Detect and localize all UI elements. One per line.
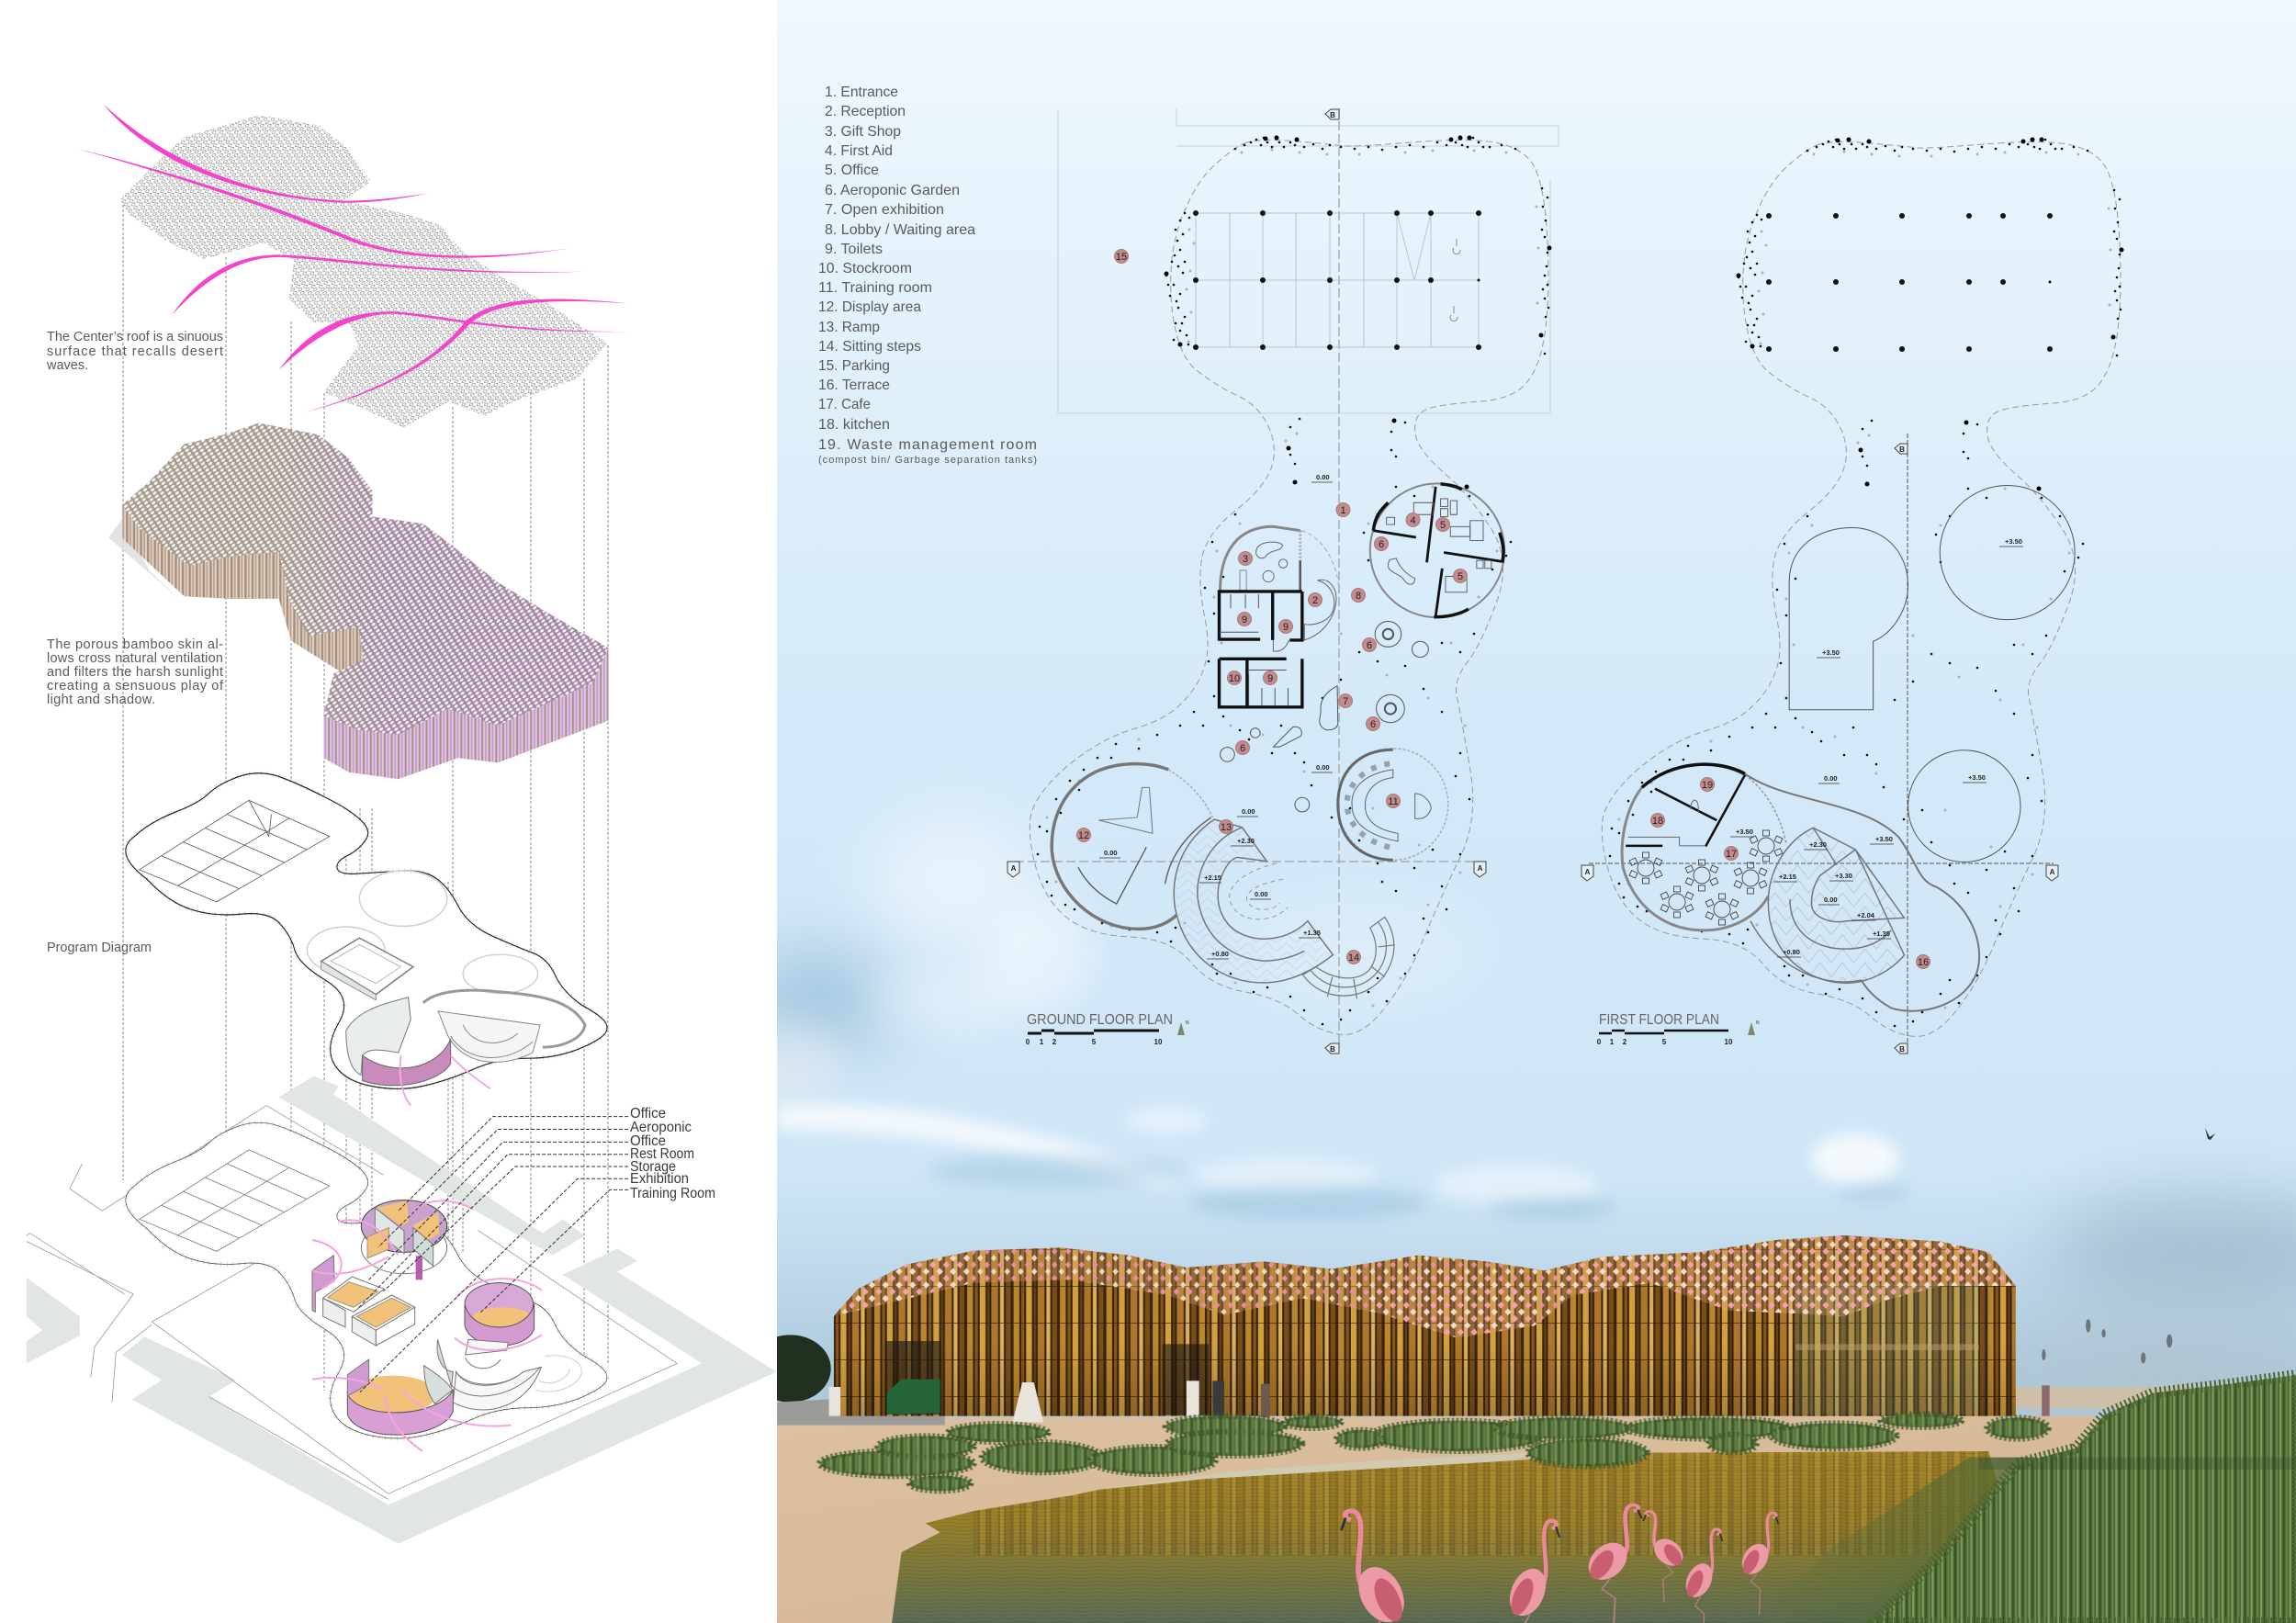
ground-floor slab blob — [126, 1122, 607, 1438]
ground floor room number markers: 4 — [1410, 515, 1416, 526]
box volume — [321, 938, 413, 995]
first floor plan — [1589, 140, 2122, 1047]
callout labels: Storage — [630, 1159, 676, 1175]
ground floor room number markers: 6 — [1240, 743, 1245, 754]
ground floor plan — [1015, 107, 1559, 1045]
reed blend into water — [1809, 1457, 2035, 1623]
section axes first floor — [1589, 434, 2054, 1047]
scale bar first floor: 0 — [1597, 1038, 1602, 1046]
first floor level markers: +2.04 — [1857, 911, 1875, 919]
icon: bird — [2205, 1128, 2215, 1140]
legend of rooms: 2. Reception — [825, 104, 906, 119]
first floor level markers: 0.00 — [1824, 774, 1838, 783]
isometric diagram: roof surface with wind lines — [77, 105, 628, 428]
title: first floor plan: FIRST FLOOR PLAN — [1599, 1012, 1719, 1028]
legend of rooms: 12. Display area — [818, 299, 921, 315]
building linework — [1052, 483, 1504, 998]
office circle — [1370, 483, 1504, 617]
legend of rooms: (compost bin/ Garbage separation tanks) — [818, 455, 1037, 466]
ground floor room number markers: 15 — [1116, 252, 1127, 263]
first floor level markers: 0.00 — [1824, 896, 1838, 904]
ground floor room number markers: 13 — [1221, 822, 1232, 833]
first floor level markers: +3.50 — [1968, 773, 1986, 782]
ground floor room number markers: 8 — [1356, 591, 1361, 602]
legend of rooms: 10. Stockroom — [818, 261, 912, 276]
water — [892, 1451, 2037, 1623]
legend of rooms: 4. First Aid — [825, 143, 893, 159]
text: roof description — [46, 330, 223, 373]
callout labels: Aeroponic — [630, 1120, 692, 1135]
glass wing — [1795, 1283, 1979, 1414]
roof over offices — [1940, 486, 2075, 620]
scale bar ground floor: 5 — [1092, 1038, 1097, 1046]
entrance openings — [885, 1341, 941, 1414]
section markers first floor: A — [1585, 868, 1591, 876]
section markers first floor: B — [1899, 445, 1905, 454]
legend of rooms: 17. Cafe — [818, 397, 871, 412]
bamboo columns lower wing — [323, 648, 608, 779]
text: roof description: waves. — [46, 358, 88, 373]
ground floor room number markers: 7 — [1343, 696, 1348, 707]
faint site lines — [1058, 107, 1559, 413]
first-floor slab blob — [126, 773, 607, 1106]
sand ground — [777, 1416, 2133, 1623]
roof pink panels — [838, 1235, 2016, 1338]
vertical dashed projection lines — [123, 205, 608, 1391]
scale bar ground floor: 0 — [1026, 1038, 1030, 1046]
text: bamboo skin description — [47, 637, 224, 707]
roof over services — [1789, 528, 1908, 710]
white dot grid — [122, 423, 608, 735]
callout labels — [630, 1106, 715, 1201]
cafe tables — [1629, 830, 1783, 925]
first floor level markers: +0.80 — [1783, 948, 1800, 956]
terrace outline — [1745, 773, 1979, 1011]
legend of rooms: 14. Sitting steps — [818, 339, 921, 355]
left purple wall segments — [312, 1256, 334, 1312]
north arrow ground floor — [1177, 1020, 1189, 1035]
section markers ground floor: A — [1478, 864, 1483, 873]
wind lines pink — [77, 105, 628, 412]
first floor level markers: +2.30 — [1809, 840, 1827, 849]
ramp stepped arcs — [437, 1339, 541, 1410]
roof over training — [1908, 750, 2020, 862]
office aeroponic cylinder — [361, 1200, 447, 1279]
ground floor room number markers: 14 — [1348, 952, 1359, 964]
wind arrows pink — [312, 1200, 542, 1451]
callout labels: Office — [630, 1133, 666, 1149]
legend of rooms: 8. Lobby / Waiting area — [825, 222, 975, 238]
first floor room number markers: 18 — [1652, 816, 1663, 827]
text: bamboo skin description: and filters the harsh sunlight — [47, 665, 223, 680]
isometric diagram: bamboo skin volume — [108, 423, 608, 779]
roof mesh surface — [119, 115, 607, 428]
callout labels: Office — [630, 1106, 666, 1121]
ground floor level markers: 0.00 — [1316, 473, 1330, 481]
bamboo columns upper wing — [329, 490, 372, 524]
legend of rooms: 5. Office — [825, 163, 879, 178]
section markers ground floor — [1007, 109, 1486, 1054]
flamingos — [1341, 1505, 1778, 1623]
first floor level markers: +3.50 — [1875, 835, 1893, 843]
scale bar first floor: 1 — [1610, 1038, 1615, 1046]
legend of rooms: 1. Entrance — [825, 85, 898, 100]
section markers ground floor: A — [1011, 864, 1017, 873]
ground floor room number markers: 6 — [1367, 640, 1372, 651]
ground floor room number markers: 6 — [1379, 539, 1384, 550]
ground floor room number markers: 5 — [1440, 520, 1446, 531]
ground floor room number markers: 3 — [1243, 554, 1248, 565]
display area circle — [1052, 764, 1212, 929]
first floor level markers: +3.50 — [2005, 537, 2022, 546]
section markers ground floor: B — [1330, 111, 1335, 119]
first floor room number markers: 19 — [1702, 780, 1713, 791]
section markers ground floor: B — [1330, 1045, 1335, 1054]
ground floor level markers: +0.80 — [1211, 950, 1229, 958]
aeroponic rings — [1221, 622, 1428, 812]
trees first floor — [1610, 140, 2122, 1026]
ramp top — [438, 1011, 540, 1062]
ramp first floor — [1750, 828, 1904, 983]
ground floor room number markers: 10 — [1229, 673, 1240, 684]
ground floor room number markers: 11 — [1388, 796, 1399, 807]
ground floor level markers: +2.15 — [1204, 873, 1221, 882]
white wall cylinder — [346, 997, 411, 1075]
north arrow first floor — [1748, 1020, 1760, 1035]
north arrow ground floor: N — [1186, 1020, 1189, 1026]
parking grid — [1193, 210, 1481, 350]
section markers first floor: A — [2050, 868, 2055, 876]
scale bar first floor: 2 — [1623, 1038, 1627, 1046]
reeds right — [1873, 1375, 2296, 1623]
first floor level markers: +3.50 — [1822, 648, 1840, 657]
ground floor level markers: 0.00 — [1316, 763, 1330, 772]
ground floor room number markers — [1076, 250, 1468, 964]
gift shop arc — [1221, 526, 1339, 592]
callout labels: Rest Room — [630, 1146, 694, 1162]
columns grid — [1766, 213, 2053, 352]
car — [887, 1380, 940, 1414]
sitting steps faint rings — [535, 1356, 581, 1392]
parking grid first tier — [140, 800, 330, 902]
ground-floor rooms isometric — [312, 1200, 581, 1451]
parking grid ground tier — [140, 1150, 330, 1251]
scale bar ground floor: 10 — [1154, 1038, 1163, 1046]
ground floor room number markers: 9 — [1267, 673, 1273, 684]
legend of rooms: 3. Gift Shop — [825, 124, 901, 140]
callout labels: Training Room — [630, 1186, 715, 1201]
road — [777, 1399, 945, 1426]
training room circle — [1338, 749, 1448, 860]
text: roof description: The Center’s roof is a sinuous — [47, 330, 223, 344]
north arrow first floor: N — [1756, 1020, 1760, 1026]
legend of rooms: 7. Open exhibition — [825, 202, 944, 218]
first floor level markers: +2.15 — [1779, 873, 1796, 881]
terrace curved wall — [423, 990, 585, 1047]
bamboo columns left wing — [122, 505, 368, 673]
building outlines first floor — [1622, 486, 2075, 1011]
title: ground floor plan: GROUND FLOOR PLAN — [1027, 1012, 1173, 1028]
ground floor level markers — [1099, 473, 1333, 959]
callout leader lines — [358, 1117, 628, 1392]
scale bar first floor — [1597, 1031, 1733, 1046]
trees and shrubs dots — [1038, 138, 1549, 1024]
toilets block — [1219, 592, 1302, 707]
first floor level markers — [1730, 537, 2023, 957]
people — [829, 1381, 2050, 1422]
sitting steps arcs — [1303, 917, 1395, 998]
ground floor room number markers: 9 — [1242, 614, 1247, 626]
rest room and storage boxes — [323, 1277, 415, 1346]
ground floor level markers: 0.00 — [1255, 890, 1268, 898]
section markers first floor: B — [1899, 1045, 1905, 1054]
bamboo skin shadow — [108, 519, 179, 599]
text: bamboo skin description: light and shadow. — [47, 693, 155, 707]
sky background panel — [777, 0, 2296, 1426]
ground floor room number markers: 2 — [1312, 595, 1318, 606]
legend of rooms: 15. Parking — [818, 358, 890, 374]
legend of rooms: 6. Aeroponic Garden — [825, 183, 960, 198]
ground floor room number markers: 6 — [1370, 719, 1376, 730]
first floor room number markers: 16 — [1918, 957, 1929, 968]
ramp with hatch — [1174, 819, 1333, 983]
first floor level markers: +1.35 — [1873, 930, 1890, 938]
ground floor level markers: +2.30 — [1237, 837, 1255, 845]
upper tier arrows — [400, 1055, 490, 1106]
first floor level markers: +3.50 — [1736, 828, 1753, 836]
text: bamboo skin description: The porous bamboo skin al- — [47, 637, 223, 652]
distant ground — [2008, 1387, 2201, 1408]
reception desk — [1304, 580, 1336, 640]
purple wall cylinder — [363, 1039, 451, 1086]
text: program diagram: Program Diagram — [47, 941, 152, 955]
ground floor level markers: 0.00 — [1242, 807, 1255, 816]
cafe circle — [1622, 764, 1786, 930]
text: bamboo skin description: creating a sensuous play of — [47, 679, 224, 693]
exhibition cylinder — [347, 1359, 453, 1435]
legend of rooms: 9. Toilets — [825, 242, 883, 257]
first floor level markers: +3.30 — [1835, 872, 1852, 880]
legend of rooms: 16. Terrace — [818, 378, 890, 393]
legend of rooms: 11. Training room — [818, 280, 932, 296]
section markers first floor — [1581, 444, 2058, 1054]
central dashed rings — [1230, 863, 1288, 919]
first floor room number markers: 17 — [1726, 849, 1737, 860]
purple light tint — [122, 423, 608, 735]
legend of rooms: 19. Waste management room — [818, 437, 1037, 453]
building bamboo facade — [834, 1235, 2016, 1416]
scale bar first floor: 5 — [1662, 1038, 1667, 1046]
scale bar first floor: 10 — [1725, 1038, 1733, 1046]
ground floor room number markers: 9 — [1283, 622, 1289, 633]
rendering: landscape and building — [749, 1235, 2296, 1623]
scale bar ground floor: 2 — [1052, 1038, 1057, 1046]
grass tufts — [819, 1414, 2049, 1491]
text: roof description: surface that recalls desert — [47, 344, 223, 359]
legend of rooms: 18. kitchen — [818, 417, 890, 433]
ground floor room number markers: 5 — [1458, 571, 1463, 582]
legend of rooms — [818, 85, 1037, 466]
reed shade band — [1979, 1458, 2296, 1470]
reed tops sparse — [2042, 1319, 2172, 1363]
left trees — [777, 1335, 831, 1402]
scale bar ground floor: 1 — [1040, 1038, 1044, 1046]
ground floor level markers: +1.35 — [1303, 929, 1321, 937]
callout labels: Exhibition — [630, 1171, 689, 1187]
ground floor level markers: 0.00 — [1104, 849, 1118, 857]
text: bamboo skin description: lows cross natural ventilation — [47, 651, 223, 666]
legend of rooms: 13. Ramp — [818, 320, 880, 335]
ground floor room number markers: 1 — [1340, 505, 1346, 516]
shore pale shallow — [1099, 1453, 1535, 1490]
first floor room number markers — [1651, 777, 1930, 968]
section axes — [1015, 108, 1480, 1045]
ground floor room number markers: 12 — [1078, 830, 1089, 841]
circular voids — [307, 871, 537, 994]
site plan grey bands and lines — [27, 1076, 777, 1544]
training room cylinder — [465, 1283, 535, 1346]
white left panel background — [0, 0, 777, 1623]
roof dots surface — [122, 423, 608, 735]
scale bar ground floor — [1026, 1031, 1163, 1046]
